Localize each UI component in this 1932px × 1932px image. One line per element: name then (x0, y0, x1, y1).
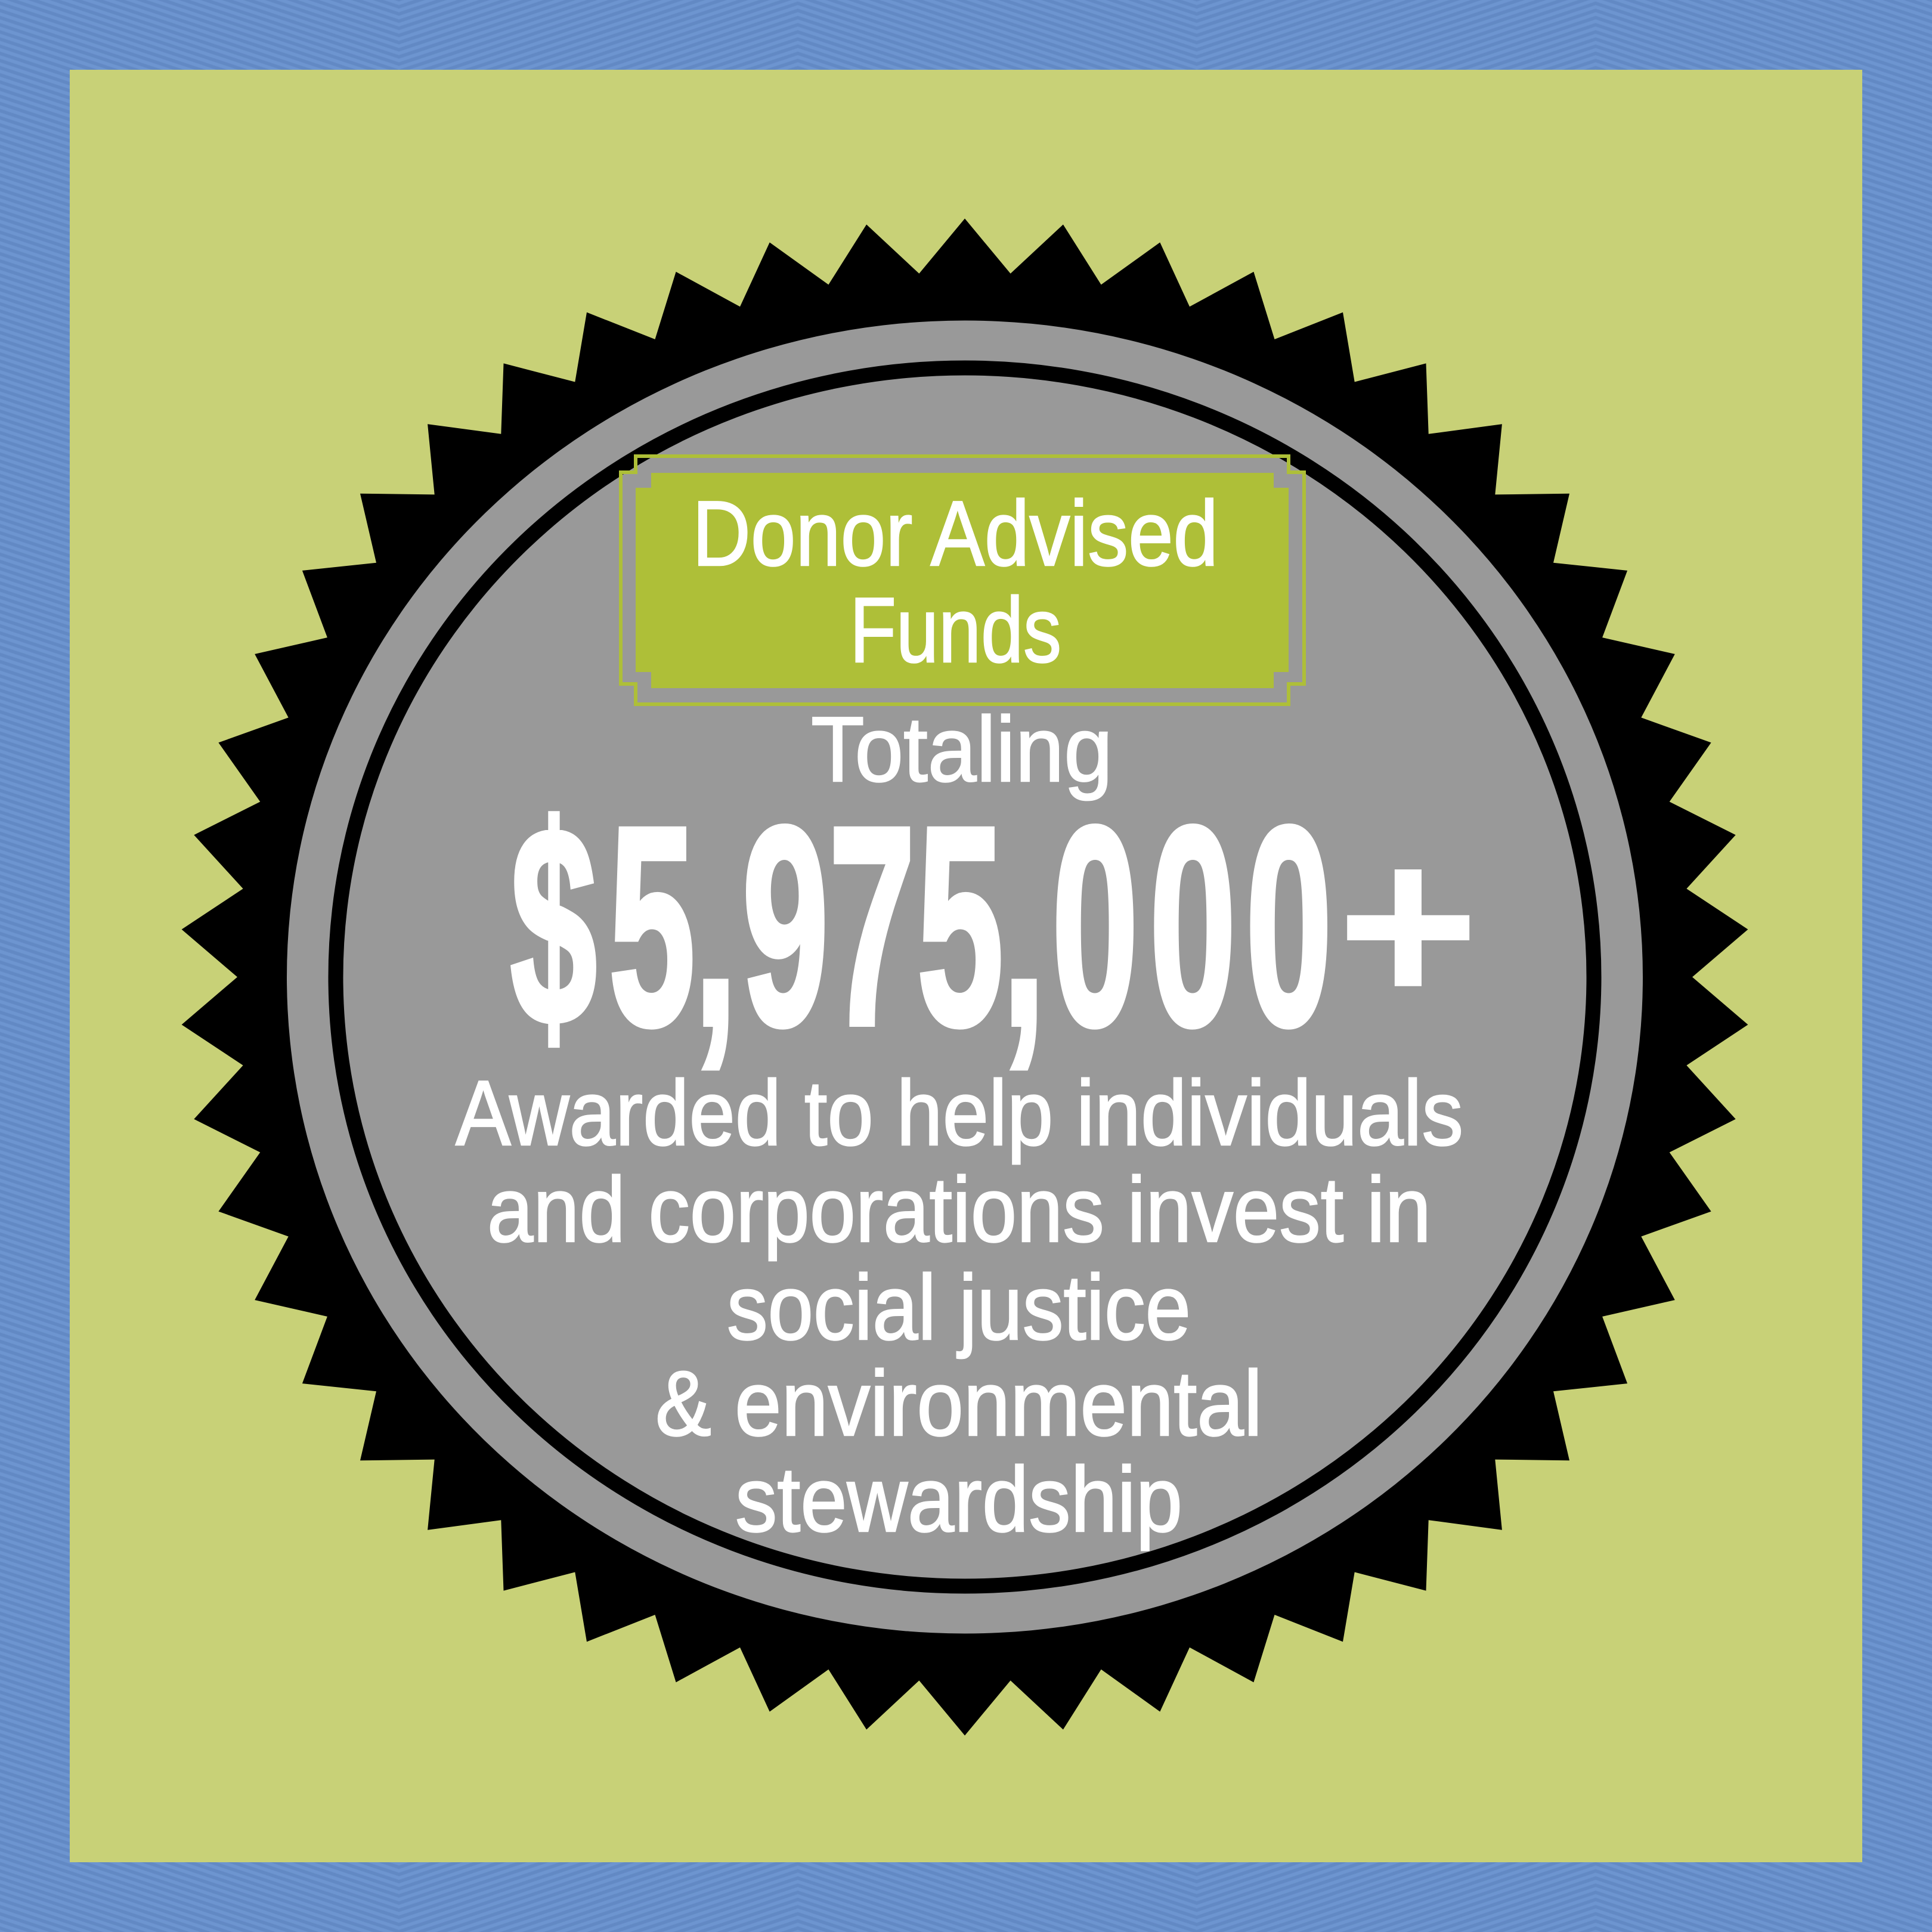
grey outer disc (287, 321, 1643, 1634)
banner (621, 456, 1304, 704)
description: and corporations invest in (487, 1158, 1431, 1261)
banner heading (692, 482, 1218, 682)
description: stewardship (735, 1448, 1182, 1551)
description: Awarded to help individuals (456, 1061, 1463, 1165)
totaling label: Totaling (811, 698, 1113, 801)
description (456, 1061, 1463, 1551)
amount figure: $5,975,000 (510, 769, 1332, 1085)
banner outline frame (621, 456, 1304, 704)
black starburst seal (182, 218, 1748, 1735)
banner fill plate (636, 473, 1289, 688)
banner heading: Donor Advised (692, 482, 1218, 585)
description: social justice (727, 1256, 1191, 1359)
description: & environmental (655, 1352, 1262, 1455)
banner heading: Funds (850, 578, 1061, 682)
black inner ring (336, 368, 1594, 1586)
amount figure: + (1337, 797, 1479, 1053)
